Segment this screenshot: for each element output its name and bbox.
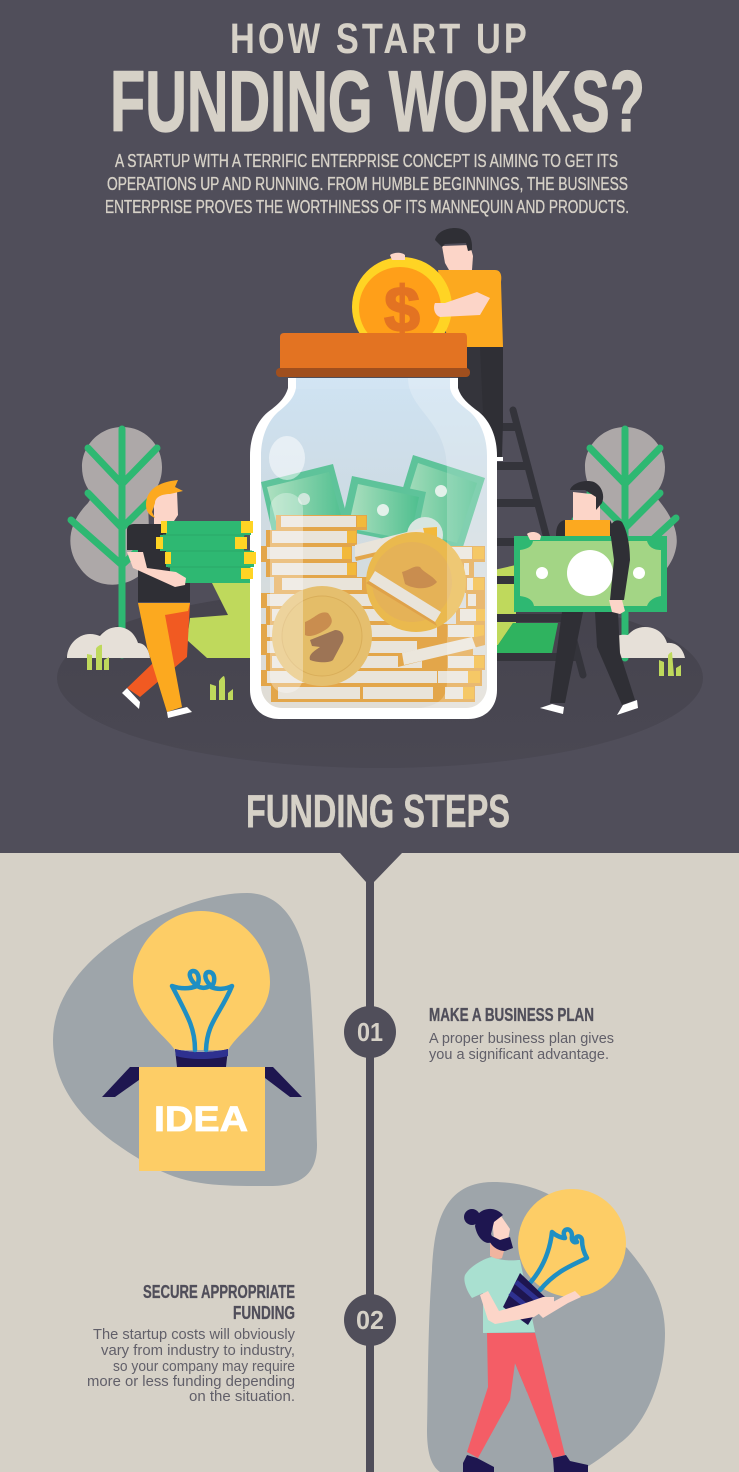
front leg <box>138 603 190 712</box>
dark header background <box>0 0 739 853</box>
box <box>139 1067 265 1171</box>
person with money stack <box>122 480 256 718</box>
step 2 text: so your company may require <box>113 1358 295 1375</box>
light bulb <box>133 911 270 1050</box>
big bulb <box>518 1189 626 1297</box>
green plant shapes behind jar <box>187 565 558 658</box>
tree: right <box>575 427 677 658</box>
hair and beard <box>464 1209 480 1225</box>
step 1 text: A proper business plan gives <box>429 1030 614 1047</box>
legs <box>550 612 583 703</box>
banknotes in jar <box>261 455 485 553</box>
shirt <box>464 1257 535 1333</box>
banknote <box>514 536 667 612</box>
tree: left <box>70 427 170 655</box>
intro text <box>105 151 629 217</box>
back leg shade <box>515 1340 540 1400</box>
step 2 text: FUNDING <box>233 1303 295 1323</box>
blob <box>427 1182 665 1472</box>
shirt <box>556 520 618 536</box>
timeline <box>340 853 402 1472</box>
step 1 number badge <box>344 1006 396 1058</box>
arm <box>127 552 186 587</box>
person with banknote <box>514 481 667 715</box>
arm and hand on coin <box>390 253 490 317</box>
step 2 text: SECURE APPROPRIATE <box>143 1282 295 1302</box>
ground ellipse <box>57 588 703 768</box>
step 1 text: you a significant advantage. <box>429 1046 609 1063</box>
step 1 text: MAKE A BUSINESS PLAN <box>429 1005 594 1025</box>
grass tufts <box>87 645 681 700</box>
large coin: left <box>272 586 372 686</box>
step 1 number badge: 01 <box>357 1017 383 1047</box>
filament <box>172 971 232 1050</box>
torso <box>127 524 190 602</box>
large coin: right <box>366 532 466 632</box>
arms <box>536 1291 581 1318</box>
trousers <box>467 1333 565 1458</box>
title <box>110 15 645 150</box>
illustration: man carrying bulb <box>427 1182 665 1472</box>
bush: left <box>67 627 150 658</box>
shoes <box>540 704 564 714</box>
jar white outline <box>250 378 497 719</box>
illustration: idea box <box>53 893 317 1186</box>
coin stacks <box>261 515 485 702</box>
head <box>573 492 600 520</box>
loose brick: front <box>398 635 485 667</box>
bulb filament <box>530 1229 587 1290</box>
head and hair <box>153 491 178 524</box>
step 2 text <box>87 1282 295 1405</box>
bulb socket <box>503 1273 545 1325</box>
step 2 number badge <box>344 1294 396 1346</box>
loose brick: top <box>355 527 437 561</box>
jar <box>250 376 497 719</box>
jar glass and contents <box>255 376 495 716</box>
box label: IDEA <box>154 1100 248 1139</box>
back leg <box>127 603 190 697</box>
title: HOW START UP <box>230 15 527 63</box>
coin going into jar: $ <box>384 273 420 345</box>
shoes <box>463 1455 494 1472</box>
jar lid <box>276 333 470 377</box>
step 2 text: vary from industry to industry, <box>101 1342 295 1359</box>
hands and arm <box>527 532 541 540</box>
step 2 number badge: 02 <box>356 1305 384 1335</box>
blob <box>53 893 317 1186</box>
person on ladder <box>435 228 503 461</box>
box flaps <box>102 1067 139 1097</box>
money stack <box>156 521 256 583</box>
light steps background <box>0 853 739 1472</box>
bulb base <box>175 1049 228 1067</box>
step 2 text: more or less funding depending <box>87 1373 295 1390</box>
step 1 text <box>429 1005 614 1063</box>
step 2 text: on the situation. <box>189 1388 295 1405</box>
neck and head <box>490 1240 506 1259</box>
step 2 text: The startup costs will obviously <box>93 1326 295 1343</box>
glass highlights <box>262 378 495 708</box>
section heading: funding steps: FUNDING STEPS <box>246 785 510 837</box>
ladder <box>490 410 583 675</box>
coin going into jar <box>352 257 452 357</box>
bush: right <box>617 627 685 658</box>
